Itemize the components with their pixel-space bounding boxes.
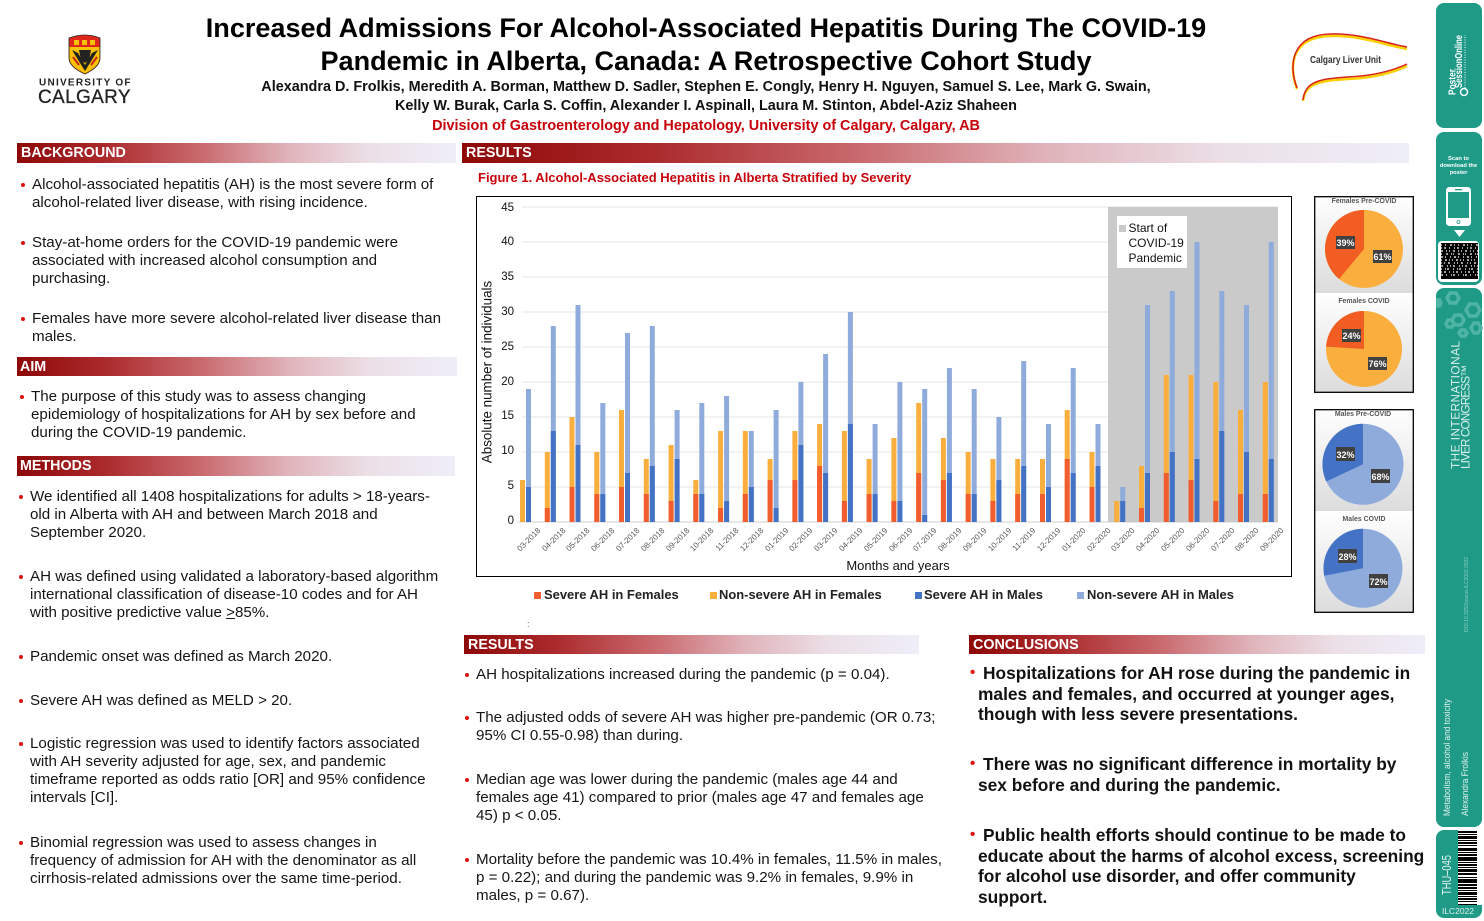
pie: Males COVID: 28% bbox=[1338, 552, 1357, 562]
text: methods bullet 1 bbox=[30, 488, 430, 542]
panel: conclusions: • bbox=[970, 826, 975, 843]
heading: conclusions: CONCLUSIONS bbox=[973, 637, 1079, 653]
heading: background bbox=[17, 143, 456, 163]
panel: poster session online bbox=[1436, 3, 1482, 128]
text: methods bullet 6 bbox=[30, 834, 416, 888]
text: background bullet 3: Females have more severe alcohol-related liver disease than bbox=[32, 310, 441, 327]
text: results bullet 2: 95% CI 0.55-0.98) than during. bbox=[476, 727, 683, 744]
x axis month labels: 03-2019 bbox=[812, 526, 840, 553]
y axis tick labels: 5 bbox=[508, 480, 514, 492]
text: methods bullet 6: cirrhosis-related admissions over the same time-period. bbox=[30, 870, 402, 887]
x axis month labels: 07-2020 bbox=[1209, 526, 1237, 553]
text: background bullet 2 bbox=[32, 234, 398, 288]
y axis tick labels: 40 bbox=[501, 236, 514, 248]
logo wordmark: CALGARY bbox=[38, 87, 131, 108]
text: methods bullet 1: September 2020. bbox=[30, 524, 146, 541]
heading: aim: AIM bbox=[20, 359, 46, 375]
pie: Females Pre-COVID: Females Pre-COVID bbox=[1332, 198, 1396, 205]
text: results bullet 3: 45) p < 0.05. bbox=[476, 807, 561, 824]
heading: conclusions bbox=[969, 635, 1425, 654]
chart legend: Non-severe AH in Males bbox=[1087, 587, 1234, 602]
heading: results lower bbox=[464, 635, 919, 654]
bar chart bbox=[480, 202, 1286, 573]
chart legend: Severe AH in Females bbox=[544, 587, 679, 602]
pie: Males Pre-COVID: 32% bbox=[1336, 450, 1355, 460]
pie: Males Pre-COVID: Males Pre-COVID bbox=[1335, 411, 1391, 418]
x axis month labels: 08-2020 bbox=[1233, 526, 1261, 553]
authors: Alexandra D. Frolkis, Meredith A. Borman, Matthew D. Sadler, Stephen E. Congly, Henry H. Nguyen, Samuel S. Lee, Mark G. Swain, bbox=[261, 79, 1151, 95]
icon: down arrow bbox=[1454, 230, 1465, 237]
heading: methods: METHODS bbox=[20, 458, 92, 474]
text: methods bullet 2: AH was defined using validated a laboratory-based algorithm bbox=[30, 568, 438, 585]
text: results bullet 2: The adjusted odds of severe AH was higher pre-pandemic (OR 0.73; bbox=[476, 708, 936, 726]
text: methods bullet 5: with AH severity adjusted for age, sex, and pandemic bbox=[30, 753, 386, 770]
y axis tick labels: 35 bbox=[501, 271, 514, 283]
x axis month labels: 06-2020 bbox=[1184, 526, 1212, 553]
pie: Females Pre-COVID: 39% bbox=[1336, 238, 1355, 248]
x axis month labels: 05-2019 bbox=[862, 526, 890, 553]
panel: international liver congress: LIVER CONGRESS™ bbox=[1458, 365, 1472, 469]
text: methods bullet 2: international classification of disease-10 codes and for AH bbox=[30, 586, 418, 603]
x axis month labels: 06-2019 bbox=[887, 526, 915, 553]
authors: Kelly W. Burak, Carla S. Coffin, Alexander I. Aspinall, Laura M. Stinton, Abdel-Aziz Shaheen bbox=[395, 98, 1017, 114]
panel: aim bbox=[17, 357, 457, 441]
text: aim bullet: The purpose of this study was to assess changing bbox=[31, 388, 366, 405]
text: results bullet 4: p = 0.22); and during the pandemic was 9.2% in females, 9.9% in bbox=[476, 869, 913, 886]
heading: results top bbox=[462, 143, 1409, 163]
panel: conclusions: • bbox=[970, 664, 975, 681]
x axis month labels: 03-2018 bbox=[515, 526, 543, 553]
text: methods bullet 1: old in Alberta with AH and between March 2018 and bbox=[30, 506, 378, 523]
text: conclusion 3: support. bbox=[978, 887, 1047, 907]
pie: Males Pre-COVID bbox=[1322, 411, 1404, 505]
chart legend bbox=[534, 587, 1234, 602]
pie: Females COVID: 24% bbox=[1342, 331, 1361, 341]
x axis month labels: 09-2018 bbox=[664, 526, 692, 553]
chart legend: Severe AH in Males bbox=[924, 587, 1043, 602]
panel: scan to download: poster bbox=[1450, 170, 1468, 176]
QR code bbox=[1438, 241, 1479, 282]
logo text: Calgary Liver Unit bbox=[1310, 55, 1382, 66]
panel: methods bbox=[17, 456, 455, 887]
y axis tick labels: 45 bbox=[501, 202, 514, 214]
x axis month labels: 10-2018 bbox=[688, 526, 716, 553]
pie: Females Pre-COVID bbox=[1325, 198, 1403, 288]
text: conclusion 2: sex before and during the pandemic. bbox=[978, 775, 1281, 795]
y axis tick labels: 20 bbox=[501, 376, 514, 388]
pie charts: females bbox=[1314, 196, 1414, 393]
text: aim bullet: during the COVID-19 pandemic. bbox=[31, 424, 246, 441]
pandemic legend: Start of bbox=[1128, 221, 1168, 235]
text: conclusion 1: Hospitalizations for AH rose during the pandemic in bbox=[983, 663, 1410, 683]
x axis month labels: 09-2020 bbox=[1258, 526, 1286, 553]
title: Increased Admissions For Alcohol-Associated Hepatitis During The COVID-19 bbox=[206, 13, 1206, 43]
pie: Females COVID bbox=[1326, 298, 1402, 387]
y axis title: Absolute number of individuals bbox=[480, 281, 494, 463]
sidebar: congress strip bbox=[1436, 3, 1483, 918]
y axis tick labels: 10 bbox=[501, 445, 514, 457]
text: methods bullet 1: We identified all 1408 hospitalizations for adults > 18-years- bbox=[30, 488, 430, 505]
panel: scan to download bbox=[1436, 132, 1482, 285]
bar chart frame bbox=[476, 196, 1292, 577]
panel: results lower bbox=[464, 635, 942, 904]
pie: Males COVID: Males COVID bbox=[1343, 516, 1385, 523]
text: aim bullet bbox=[31, 388, 416, 442]
pandemic legend: Pandemic bbox=[1128, 251, 1182, 265]
text: results bullet 3 bbox=[476, 770, 924, 825]
affiliation: Division of Gastroenterology and Hepatology, University of Calgary, Calgary, AB bbox=[432, 118, 980, 134]
presenter: Alexandra Frolkis bbox=[1460, 752, 1471, 816]
icon: phone bbox=[1446, 187, 1471, 226]
pie: Males COVID bbox=[1324, 516, 1402, 608]
decorative hexagons bbox=[1437, 293, 1481, 336]
panel: background bbox=[17, 143, 456, 345]
text: background bullet 2: associated with increased alcohol consumption and bbox=[32, 252, 377, 269]
chart legend: Non-severe AH in Females bbox=[719, 587, 882, 602]
text: background bullet 2: purchasing. bbox=[32, 270, 110, 287]
x axis month labels: 11-2018 bbox=[714, 526, 741, 553]
logo: University of Calgary bbox=[38, 34, 131, 108]
logo: Calgary Liver Unit bbox=[1292, 33, 1408, 102]
text: results bullet 3: females age 41) compared to prior (males age 47 and females age bbox=[476, 789, 924, 806]
x axis month labels: 09-2019 bbox=[961, 526, 989, 553]
abstract code: THU–045 bbox=[1439, 855, 1454, 895]
text: conclusion 3: Public health efforts should continue to be made to bbox=[983, 825, 1406, 845]
x axis month labels: 07-2018 bbox=[614, 526, 642, 553]
gridlines and y axis bbox=[518, 207, 1278, 522]
x axis month labels: 05-2018 bbox=[564, 526, 592, 553]
x axis month labels: 02-2019 bbox=[787, 526, 815, 553]
y axis tick labels: 25 bbox=[501, 341, 514, 353]
title bbox=[206, 13, 1206, 76]
x axis month labels: 05-2020 bbox=[1159, 526, 1187, 553]
text: methods bullet 2: with positive predictive value >85%. bbox=[30, 604, 269, 621]
text: conclusion 1: males and females, and occurred at younger ages, bbox=[978, 684, 1394, 704]
x axis month labels: 12-2019 bbox=[1035, 526, 1063, 553]
text: methods bullet 5 bbox=[30, 735, 426, 807]
text: background bullet 1: Alcohol-associated hepatitis (AH) is the most severe form of bbox=[32, 176, 433, 193]
x axis month labels: 11-2019 bbox=[1011, 526, 1038, 553]
DOI: DOI:10.3252/pocus.ILC2022.2022 bbox=[1464, 557, 1470, 632]
text: conclusion 1 bbox=[970, 663, 1410, 724]
x axis month labels: 04-2020 bbox=[1134, 526, 1162, 553]
heading: aim bbox=[17, 357, 457, 376]
text: results bullet 3: Median age was lower during the pandemic (males age 44 and bbox=[476, 770, 898, 788]
text: conclusion 2 bbox=[970, 754, 1396, 795]
panel: poster session online: SessionOnline bbox=[1454, 35, 1465, 88]
congress name: THE INTERNATIONAL bbox=[1448, 341, 1462, 469]
x axis month labels: 06-2018 bbox=[589, 526, 617, 553]
x axis month labels: 01-2019 bbox=[763, 526, 791, 553]
text: results bullet 2 bbox=[476, 708, 936, 745]
text: conclusion 3: for alcohol use disorder, and offer community bbox=[978, 866, 1356, 886]
text: background bullet 2: Stay-at-home orders for the COVID-19 pandemic were bbox=[32, 234, 398, 251]
authors bbox=[261, 79, 1151, 114]
bars: monthly stacked counts bbox=[520, 242, 1274, 522]
y axis tick labels: 0 bbox=[508, 515, 514, 527]
icon: crest bbox=[69, 35, 100, 74]
text: conclusion 2: There was no significant difference in mortality by bbox=[983, 754, 1396, 774]
text: background bullet 3 bbox=[32, 310, 441, 346]
session topic: Metabolism, alcohol and toxicity bbox=[1442, 699, 1453, 816]
panel: abstract number bbox=[1436, 829, 1482, 918]
x axis month labels: 08-2019 bbox=[936, 526, 964, 553]
pie: Females Pre-COVID: 61% bbox=[1373, 252, 1392, 262]
x axis month labels: 12-2018 bbox=[738, 526, 766, 553]
text: methods bullet 2 bbox=[30, 568, 438, 622]
panel: scan to download: Scan to bbox=[1448, 156, 1469, 162]
text: methods bullet 5: Logistic regression was used to identify factors associated bbox=[30, 735, 420, 752]
logo wordmark bbox=[38, 78, 131, 108]
pie: Females COVID: Females COVID bbox=[1338, 298, 1390, 305]
text: aim bullet: epidemiology of hospitalizations for AH by sex before and bbox=[31, 406, 416, 423]
text: results bullet 1: AH hospitalizations increased during the pandemic (p = 0.04). bbox=[476, 666, 890, 682]
text: background bullet 1: alcohol-related liver disease, with rising incidence. bbox=[32, 194, 368, 211]
pie charts: males bbox=[1314, 409, 1414, 613]
panel: poster session online: Poster bbox=[1448, 69, 1458, 95]
x axis month labels: 07-2019 bbox=[911, 526, 939, 553]
text: conclusion 3 bbox=[970, 825, 1424, 907]
pie: Males COVID: 72% bbox=[1369, 577, 1388, 587]
x axis month labels: 02-2020 bbox=[1085, 526, 1113, 553]
logo wordmark: UNIVERSITY OF bbox=[39, 78, 130, 88]
text: results bullet 4: males, p = 0.67). bbox=[476, 887, 589, 904]
x axis month labels: 10-2019 bbox=[986, 526, 1014, 553]
text: results bullet 4: Mortality before the pandemic was 10.4% in females, 11.5% in males, bbox=[476, 850, 942, 868]
panel: international liver congress bbox=[1436, 288, 1482, 827]
pandemic legend bbox=[1117, 216, 1187, 268]
x axis month labels: 04-2018 bbox=[540, 526, 568, 553]
x axis month labels: 03-2020 bbox=[1109, 526, 1137, 553]
x axis month labels: 04-2019 bbox=[837, 526, 865, 553]
heading: results lower: RESULTS bbox=[468, 637, 534, 653]
text: conclusion 1: though with less severe presentations. bbox=[978, 704, 1298, 724]
text: methods bullet 3: Pandemic onset was defined as March 2020. bbox=[30, 648, 332, 665]
panel: conclusions bbox=[969, 635, 1425, 907]
heading: methods bbox=[17, 456, 455, 476]
text: background bullet 1 bbox=[32, 176, 433, 212]
figure title: Figure 1. Alcohol-Associated Hepatitis in Alberta Stratified by Severity bbox=[478, 170, 911, 185]
title: Pandemic in Alberta, Canada: A Retrospective Cohort Study bbox=[320, 46, 1091, 76]
x axis month labels bbox=[515, 526, 1286, 553]
text: methods bullet 6: Binomial regression was used to assess changes in bbox=[30, 834, 377, 851]
pie: Males Pre-COVID: 68% bbox=[1371, 472, 1390, 482]
stray colon mark: : bbox=[527, 619, 530, 629]
text: results bullet 4 bbox=[476, 850, 942, 905]
ILC2022: ILC2022 bbox=[1442, 906, 1474, 916]
x axis month labels: 01-2020 bbox=[1060, 526, 1088, 553]
barcode bbox=[1458, 831, 1477, 905]
text: methods bullet 4: Severe AH was defined as MELD > 20. bbox=[30, 692, 292, 709]
text: conclusion 3: educate about the harms of alcohol excess, screening bbox=[978, 846, 1424, 866]
pandemic legend: COVID-19 bbox=[1128, 236, 1184, 250]
pandemic shaded region bbox=[1108, 207, 1278, 522]
heading: background: BACKGROUND bbox=[21, 145, 126, 161]
panel: scan to download: download the bbox=[1440, 163, 1478, 169]
y axis tick labels bbox=[501, 202, 514, 527]
text: methods bullet 5: intervals [CI]. bbox=[30, 789, 118, 806]
heading: results top: RESULTS bbox=[466, 145, 532, 161]
x axis month labels: 08-2018 bbox=[639, 526, 667, 553]
panel: conclusions: • bbox=[970, 755, 975, 772]
x axis title: Months and years bbox=[846, 558, 950, 573]
pie: Females COVID: 76% bbox=[1368, 359, 1387, 369]
text: methods bullet 5: timeframe reported as odds ratio [OR] and 95% confidence bbox=[30, 771, 426, 788]
y axis tick labels: 30 bbox=[501, 306, 514, 318]
text: methods bullet 6: frequency of admission for AH with the denominator as all bbox=[30, 852, 416, 869]
text: background bullet 3: males. bbox=[32, 328, 77, 345]
y axis tick labels: 15 bbox=[501, 410, 514, 422]
